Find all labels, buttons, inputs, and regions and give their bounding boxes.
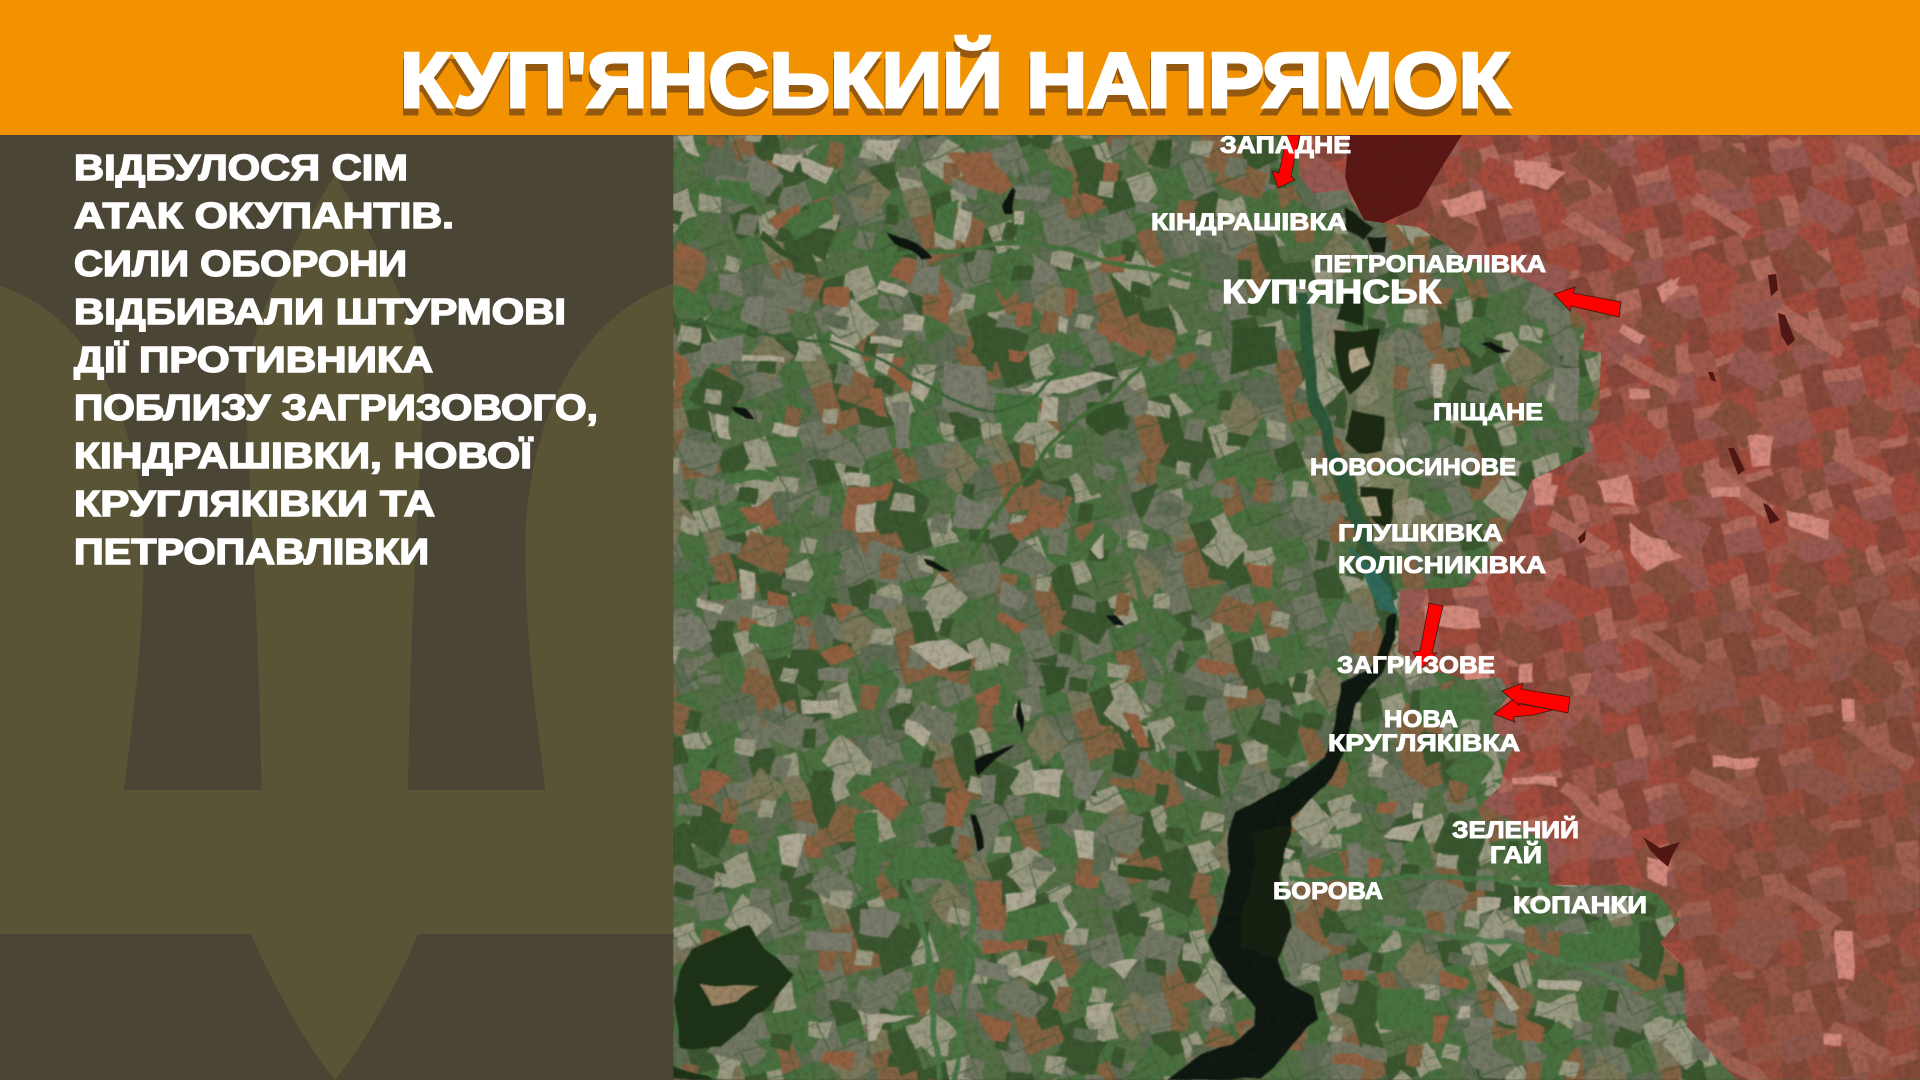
side text block bbox=[74, 147, 598, 572]
map label: Западне: ЗАПАДНЕ bbox=[1220, 132, 1351, 159]
map: bottom-left forest bbox=[672, 927, 791, 1080]
side text block: ВІДБИВАЛИ ШТУРМОВІ bbox=[74, 291, 566, 332]
side text block: КІНДРАШІВКИ, НОВОЇ bbox=[74, 435, 533, 476]
map label: Зелений: ЗЕЛЕНИЙ bbox=[1452, 816, 1579, 844]
icon: trident watermark bbox=[0, 175, 673, 1080]
map grain texture bbox=[673, 135, 1920, 1080]
side text block: КРУГЛЯКІВКИ ТА bbox=[74, 483, 435, 524]
map: forests and town near Kupiansk bbox=[1310, 207, 1410, 550]
map label: Новоосинове: НОВООСИНОВЕ bbox=[1310, 454, 1516, 481]
map fields: free territory bbox=[660, 120, 1920, 1080]
side text block: ВІДБУЛОСЯ СІМ bbox=[74, 147, 408, 188]
header bar bbox=[0, 0, 1920, 135]
arrow: Petropavlivka bbox=[1554, 287, 1621, 317]
title: КУП'ЯНСЬКИЙ НАПРЯМОК bbox=[400, 36, 1510, 124]
arrow: Nova Kruhliakivka upper bbox=[1502, 683, 1570, 713]
map label: Кругляківка: КРУГЛЯКІВКА bbox=[1328, 730, 1520, 757]
satellite map bbox=[660, 120, 1920, 1080]
map label: Петропавлівка: ПЕТРОПАВЛІВКА bbox=[1314, 251, 1546, 278]
map label: Гай: ГАЙ bbox=[1490, 841, 1542, 869]
side text block: ДІЇ ПРОТИВНИКА bbox=[74, 339, 433, 380]
map: ponds bbox=[730, 185, 1512, 850]
map label: Нова: НОВА bbox=[1384, 706, 1458, 733]
left panel bbox=[0, 135, 673, 1080]
map label: Піщане: ПІЩАНЕ bbox=[1433, 399, 1543, 426]
map: occupied territory (red overlay) bbox=[1280, 120, 1920, 1080]
arrow: Zahryzove bbox=[1413, 603, 1443, 668]
map: dark forest in occupied zone bbox=[1345, 135, 1462, 223]
arrow: Nova Kruhliakivka lower bbox=[1494, 700, 1553, 722]
map label: Куп'янськ: КУП'ЯНСЬК bbox=[1222, 273, 1442, 310]
side text block: АТАК ОКУПАНТІВ. bbox=[74, 195, 454, 236]
map label: Копанки: КОПАНКИ bbox=[1513, 892, 1647, 919]
map label: Кіндрашівка: КІНДРАШІВКА bbox=[1151, 209, 1347, 236]
map label: Колісниківка: КОЛІСНИКІВКА bbox=[1338, 552, 1546, 579]
side text block: СИЛИ ОБОРОНИ bbox=[74, 243, 407, 284]
side text block: ПЕТРОПАВЛІВКИ bbox=[74, 531, 429, 572]
map label: Борова: БОРОВА bbox=[1273, 878, 1383, 905]
side text block: ПОБЛИЗУ ЗАГРИЗОВОГО, bbox=[74, 387, 598, 428]
map: occupied-zone ponds bbox=[1578, 274, 1795, 867]
arrow: Zapadne bbox=[1272, 135, 1300, 188]
map label: Глушківка: ГЛУШКІВКА bbox=[1338, 520, 1503, 547]
map: river and reservoir bbox=[1166, 295, 1399, 1080]
map label: Загризове: ЗАГРИЗОВЕ bbox=[1337, 652, 1495, 679]
